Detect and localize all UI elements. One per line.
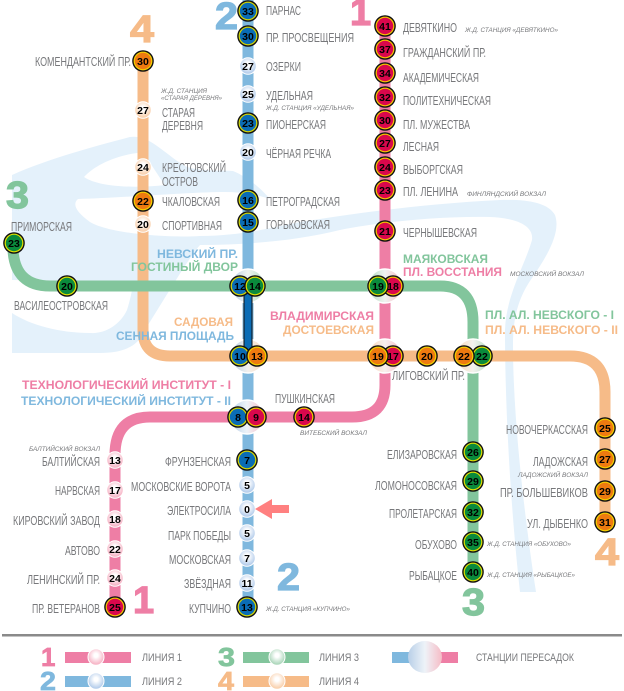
interchange: Gostiny Dvor <box>244 275 266 297</box>
station labels: line 2 south: МОСКОВСКИЕ ВОРОТА <box>131 479 231 494</box>
line 2 stations <box>236 0 259 618</box>
railway and station notes: БАЛТИЙСКИЙ ВОКЗАЛ <box>29 444 101 453</box>
station labels: line 4 south: ЛАДОЖСКАЯ <box>533 454 588 469</box>
station: Staraya Derevnya: 27 <box>137 105 149 117</box>
station: Primorskaya: 23 <box>8 238 20 250</box>
heading: Nevsky / Gostiny: НЕВСКИЙ ПР. <box>157 246 238 261</box>
interchange: Tekhnolog I: 9 <box>253 412 259 424</box>
station labels: line 3 west <box>11 219 108 313</box>
station: Novocherkasskaya <box>594 417 616 439</box>
legend <box>40 641 574 691</box>
line 2 track <box>242 0 254 607</box>
station labels: line 2 south <box>131 454 231 616</box>
station labels: line 2 north: ЧЁРНАЯ РЕЧКА <box>266 146 331 161</box>
station: Park Pobedy: 5 <box>244 528 250 540</box>
station: Dybenko: 31 <box>599 517 611 529</box>
station: Elizarovskaya: 26 <box>467 447 479 459</box>
station labels: line 2 south: ПАРК ПОБЕДЫ <box>168 528 231 543</box>
station: Gorkovskaya: 15 <box>242 217 254 229</box>
station labels: line 3 west: ПРИМОРСКАЯ <box>11 219 72 234</box>
station labels: line 4 north: КОМЕНДАНТСКИЙ ПР. <box>35 54 131 69</box>
heading: Tekhnologichesky <box>21 377 231 408</box>
arrow: you are here <box>255 499 289 519</box>
station labels: line 1 south: ЛЕНИНСКИЙ ПР. <box>27 572 100 587</box>
station: Udelnaya: 25 <box>242 89 254 101</box>
station: Udelnaya <box>240 86 256 102</box>
railway and station notes: ВИТЕБСКИЙ ВОКЗАЛ <box>300 428 368 437</box>
station: Lomonosovskaya: 29 <box>467 476 479 488</box>
station: Baltiyskaya: 13 <box>109 455 121 467</box>
station labels: line 2 south: ЭЛЕКТРОСИЛА <box>167 503 231 518</box>
interchange: Sadovaya: 13 <box>251 351 263 363</box>
railway and station notes: ФИНЛЯНДСКИЙ ВОКЗАЛ <box>467 189 547 198</box>
station: Frunzenskaya: 7 <box>244 455 250 467</box>
numeral 2 bottom: 2 <box>277 557 300 599</box>
station: Dybenko <box>594 511 616 533</box>
station: Prosvescheniya: 30 <box>242 31 254 43</box>
station: Ladozhskaya: 27 <box>599 454 611 466</box>
station: Narvskaya: 17 <box>109 485 121 497</box>
station: Proletarskaya: 32 <box>467 507 479 519</box>
station: Elizarovskaya <box>462 441 484 463</box>
station: Krestovsky <box>135 159 151 175</box>
station: Kirovsky: 18 <box>109 514 121 526</box>
heading: Vladimirskaya / Dostoevskaya: ДОСТОЕВСКАЯ <box>283 323 374 337</box>
station: Pushkinskaya <box>293 406 315 428</box>
interchange halo: Технологический <box>230 400 264 434</box>
heading: Sadovaya / Sennaya: СЕННАЯ ПЛОЩАДЬ <box>116 329 234 343</box>
heading: Mayakovskaya / Vosstaniya: ПЛ. ВОССТАНИЯ <box>403 265 502 279</box>
station: Kupchino: 13 <box>241 602 253 614</box>
heading: Tekhnologichesky: ТЕХНОЛОГИЧЕСКИЙ ИНСТИТУТ - I <box>22 377 231 392</box>
line 1 stations <box>104 15 396 618</box>
station labels: line 2 north: ПАРНАС <box>266 3 301 18</box>
station: Grazhdansky: 37 <box>379 44 391 56</box>
station: Veteranov: 25 <box>109 602 121 614</box>
heading: Vladimirskaya / Dostoevskaya <box>270 309 374 337</box>
station labels: line 3 south: ПРОЛЕТАРСКАЯ <box>389 506 457 521</box>
station: Muzhestva: 30 <box>379 115 391 127</box>
station labels: middle <box>275 368 465 406</box>
station labels: line 1 south <box>13 454 100 616</box>
station labels: line 1 north: ГРАЖДАНСКИЙ ПР. <box>403 45 486 60</box>
heading: Mayakovskaya / Vosstaniya <box>403 252 502 279</box>
line 4 track <box>143 61 605 522</box>
interchange: Ploshchad Vosstaniya: 18 <box>387 281 399 293</box>
station: Zvezdnaya <box>239 575 255 591</box>
station labels: line 2 south: КУПЧИНО <box>189 601 231 616</box>
railway and station notes: Ж.Д. СТАНЦИЯ «РЫБАЦКОЕ» <box>486 572 575 579</box>
station: Moskovskie Vorota: 5 <box>244 480 250 492</box>
station: Zvezdnaya: 11 <box>241 578 253 590</box>
numeral 1 bottom: 1 <box>133 580 154 622</box>
interchange stations <box>227 275 493 428</box>
station: Avtovo: 22 <box>109 544 121 556</box>
heading: Alexander Nevsky: ПЛ. АЛ. НЕВСКОГО - II <box>485 323 618 337</box>
station: Lesnaya: 27 <box>379 138 391 150</box>
station labels: line 4 north: КРЕСТОВСКИЙ <box>162 160 226 175</box>
station labels: line 1 south: КИРОВСКИЙ ЗАВОД <box>13 513 100 528</box>
station labels: line 2 north: ОЗЕРКИ <box>266 59 301 74</box>
station: Lesnaya <box>374 132 396 154</box>
station labels: line 1 north: ВЫБОРГСКАЯ <box>403 162 463 177</box>
station labels: line 4 north <box>35 54 226 233</box>
station labels: line 1 north: ПОЛИТЕХНИЧЕСКАЯ <box>403 93 491 108</box>
railway and station notes: МОСКОВСКИЙ ВОКЗАЛ <box>510 269 585 278</box>
heading: Alexander Nevsky <box>485 308 618 337</box>
interchange: Tekhnolog II <box>227 406 249 428</box>
heading: Tekhnologichesky: ТЕХНОЛОГИЧЕСКИЙ ИНСТИТУТ - II <box>21 393 231 408</box>
station: Politekhnicheskaya <box>374 86 396 108</box>
interchange headings <box>21 246 618 408</box>
station labels: line 3 south: РЫБАЦКОЕ <box>409 568 457 583</box>
numeral 3 bottom: 3 <box>462 582 485 624</box>
interchange: Nevskogo II: 22 <box>458 351 470 363</box>
station: Moskovskaya <box>239 550 255 566</box>
interchange: Tekhnolog II: 8 <box>235 412 241 424</box>
line 3 stations <box>3 232 484 583</box>
station: Sportivnaya: 20 <box>137 219 149 231</box>
interchange: Nevsky Prospekt <box>229 275 251 297</box>
interchange: Vladimirskaya: 17 <box>387 351 399 363</box>
station: Chernyshevskaya: 21 <box>379 226 391 238</box>
railway and station notes: Ж.Д. СТАНЦИЯ «ОБУХОВО» <box>486 541 571 548</box>
railway and station notes: ЛАДОЖСКИЙ ВОКЗАЛ <box>517 470 589 479</box>
heading: Nevsky / Gostiny <box>131 246 238 274</box>
station labels: line 3 south: ЕЛИЗАРОВСКАЯ <box>387 447 457 462</box>
legend item: line 4: ЛИНИЯ 4 <box>319 676 359 688</box>
station labels: line 2 south: ФРУНЗЕНСКАЯ <box>165 454 231 469</box>
station labels: line 4 south <box>500 422 588 531</box>
station: Chernaya Rechka <box>240 144 256 160</box>
station: Ligovsky: 20 <box>421 351 433 363</box>
station: Baltiyskaya <box>107 452 123 468</box>
station: Devyatkino: 41 <box>379 21 391 33</box>
station labels: line 4 north: ОСТРОВ <box>162 174 198 189</box>
station: Rybatskoe: 40 <box>467 567 479 579</box>
interchange: Gostiny Dvor: 14 <box>249 281 261 293</box>
interchange halo: Владимирская <box>368 339 402 373</box>
station: Muzhestva <box>374 109 396 131</box>
legend item: line 2: ЛИНИЯ 2 <box>142 676 182 688</box>
connector: Gostiny Dvor to Sennaya <box>244 290 252 352</box>
heading: Mayakovskaya / Vosstaniya: МАЯКОВСКАЯ <box>403 252 488 266</box>
station: Komendantsky: 30 <box>137 56 149 68</box>
station labels: middle: ЛИГОВСКИЙ ПР. <box>392 368 465 383</box>
station labels: line 2 north: ПЕТРОГРАДСКАЯ <box>266 194 340 209</box>
station: Novocherkasskaya: 25 <box>599 423 611 435</box>
interchange: Ploshchad Vosstaniya <box>382 275 404 297</box>
station: Ladozhskaya <box>594 448 616 470</box>
station: Grazhdansky <box>374 38 396 60</box>
station: Elektrosila <box>239 501 255 517</box>
interchange halo: Невский <box>231 269 265 303</box>
station: Lenina: 23 <box>379 185 391 197</box>
station labels: line 1 north: ПЛ. МУЖЕСТВА <box>403 117 470 132</box>
heading: Alexander Nevsky: ПЛ. АЛ. НЕВСКОГО - I <box>485 308 614 322</box>
station: Vyborgskaya: 24 <box>379 162 391 174</box>
line 4 stations <box>132 50 616 533</box>
station: Ozerki: 27 <box>242 61 254 73</box>
interchange halo: Садовая <box>231 339 265 373</box>
numeral 4 bottom: 4 <box>595 532 619 574</box>
station: Prosvescheniya <box>237 25 259 47</box>
railway and station notes: «СТАРАЯ ДЕРЕВНЯ» <box>161 95 222 102</box>
station: Politekhnicheskaya: 32 <box>379 92 391 104</box>
interchange: Dostoevskaya <box>367 345 389 367</box>
line 1 track <box>115 20 385 607</box>
station: Komendantsky <box>132 50 154 72</box>
station: Proletarskaya <box>462 501 484 523</box>
river background <box>12 137 556 592</box>
station labels: line 4 south: ПР. БОЛЬШЕВИКОВ <box>500 485 588 500</box>
station labels: line 1 south: АВТОВО <box>65 543 100 558</box>
numeral 3 left: 3 <box>6 175 29 217</box>
station labels: line 2 south: МОСКОВСКАЯ <box>169 552 231 567</box>
station labels: line 2 north <box>266 3 354 232</box>
interchange: Vladimirskaya <box>382 345 404 367</box>
station: Bolshevikov <box>594 480 616 502</box>
legend item: line 3 <box>218 642 359 672</box>
legend item: line 4 <box>218 666 359 691</box>
station labels: line 1 north: ПЛ. ЛЕНИНА <box>403 184 458 199</box>
station labels: line 4 north: СТАРАЯ <box>162 105 195 120</box>
station: Moskovskaya: 7 <box>244 553 250 565</box>
station labels: line 4 north: ЧКАЛОВСКАЯ <box>162 194 220 209</box>
station labels: line 2 north: ПР. ПРОСВЕЩЕНИЯ <box>266 30 354 45</box>
interchange: Nevskogo I <box>471 345 493 367</box>
station: Narvskaya <box>107 482 123 498</box>
station: Petrogradskaya: 16 <box>242 195 254 207</box>
station: Leninsky <box>107 570 123 586</box>
station: Chkalovskaya <box>132 190 154 212</box>
station labels: line 2 north: ПИОНЕРСКАЯ <box>266 117 326 132</box>
station: Akademicheskaya: 34 <box>379 68 391 80</box>
station labels: line 1 south: ПР. ВЕТЕРАНОВ <box>32 601 100 616</box>
station: Ozerki <box>240 58 256 74</box>
interchange: Sadovaya <box>246 345 268 367</box>
station: Vyborgskaya <box>374 156 396 178</box>
interchange: Nevskogo I: 22 <box>476 351 488 363</box>
railway and station notes: Ж.Д. СТАНЦИЯ «КУПЧИНО» <box>265 606 350 613</box>
station: Primorskaya <box>3 232 25 254</box>
interchange halo: Невского <box>456 339 490 373</box>
station: Moskovskie Vorota <box>239 477 255 493</box>
station: Park Pobedy <box>239 525 255 541</box>
station: Obukhovo <box>462 531 484 553</box>
legend item: line 1: ЛИНИЯ 1 <box>142 652 182 664</box>
line 3 track <box>13 243 473 572</box>
legend item: line 2 <box>40 666 182 691</box>
interchange: Sennaya: 10 <box>234 351 246 363</box>
station: Chernaya Rechka: 20 <box>242 147 254 159</box>
legend item: interchange <box>392 641 574 673</box>
interchange: Sennaya <box>229 345 251 367</box>
station labels: line 1 north: ДЕВЯТКИНО <box>403 20 457 35</box>
station: Devyatkino <box>374 15 396 37</box>
interchange: Mayakovskaya: 19 <box>372 281 384 293</box>
heading: Sadovaya / Sennaya <box>116 315 234 343</box>
station labels: line 1 north: АКАДЕМИЧЕСКАЯ <box>403 70 479 85</box>
station labels: line 3 south: ОБУХОВО <box>415 537 457 552</box>
station: Ligovsky <box>416 345 438 367</box>
railway and station notes: Ж.Д. СТАНЦИЯ <box>160 88 208 95</box>
legend item: line 3: 3 <box>218 642 235 672</box>
station: Parnas: 33 <box>242 6 254 18</box>
numeral 4 top: 4 <box>130 9 154 51</box>
interchange: Nevsky Prospekt: 12 <box>234 281 246 293</box>
station: Lomonosovskaya <box>462 470 484 492</box>
station: Staraya Derevnya <box>135 102 151 118</box>
station: Chkalovskaya: 22 <box>137 196 149 208</box>
station labels: line 2 north: УДЕЛЬНАЯ <box>266 88 313 103</box>
station labels: line 2 south: ЗВЁЗДНАЯ <box>184 576 231 591</box>
legend item: line 1: 1 <box>41 642 55 672</box>
station: Lenina <box>374 179 396 201</box>
heading: Vladimirskaya / Dostoevskaya: ВЛАДИМИРСКАЯ <box>270 309 374 323</box>
station: Bolshevikov: 29 <box>599 486 611 498</box>
station: Leninsky: 24 <box>109 573 121 585</box>
station: Krestovsky: 24 <box>137 162 149 174</box>
station labels: middle: ПУШКИНСКАЯ <box>275 391 335 406</box>
station labels: line 1 north: ЛЕСНАЯ <box>403 139 439 154</box>
station: Rybatskoe <box>462 561 484 583</box>
railway and station notes: Ж.Д. СТАНЦИЯ «ДЕВЯТКИНО» <box>464 27 558 34</box>
railway and station notes: Ж.Д. СТАНЦИЯ «УДЕЛЬНАЯ» <box>265 105 354 112</box>
heading: Sadovaya / Sennaya: САДОВАЯ <box>174 315 233 329</box>
station: Avtovo <box>107 541 123 557</box>
river island <box>84 153 165 187</box>
station labels: line 3 south: ЛОМОНОСОВСКАЯ <box>375 478 457 493</box>
station: Kirovsky <box>107 511 123 527</box>
station: Chernyshevskaya <box>374 220 396 242</box>
station labels: line 3 west: ВАСИЛЕОСТРОВСКАЯ <box>14 298 108 313</box>
station: Parnas <box>237 0 259 22</box>
station: Kupchino <box>236 596 258 618</box>
station: Sportivnaya <box>135 216 151 232</box>
heading: Nevsky / Gostiny: ГОСТИНЫЙ ДВОР <box>131 259 238 274</box>
station: Vasileostrovskaya <box>56 275 78 297</box>
station: Akademicheskaya <box>374 62 396 84</box>
station labels: line 1 north: ЧЕРНЫШЕВСКАЯ <box>403 225 477 240</box>
interchange: Nevskogo II <box>453 345 475 367</box>
station labels: line 4 north: СПОРТИВНАЯ <box>162 218 222 233</box>
station: Vasileostrovskaya: 20 <box>61 281 73 293</box>
station: Frunzenskaya <box>236 449 258 471</box>
station labels: line 1 south: НАРВСКАЯ <box>55 483 100 498</box>
legend item: line 1 <box>41 642 182 672</box>
interchange halo: Маяковская <box>368 269 402 303</box>
station: Pushkinskaya: 14 <box>298 412 310 424</box>
station labels: line 4 north: ДЕРЕВНЯ <box>162 118 203 133</box>
station: Veteranov <box>104 596 126 618</box>
interchange: Dostoevskaya: 19 <box>372 351 384 363</box>
station labels: line 3 south <box>375 447 457 583</box>
legend divider <box>2 634 622 636</box>
station: Elektrosila: 0 <box>244 504 250 516</box>
legend item: line 3: ЛИНИЯ 3 <box>319 652 359 664</box>
station: Obukhovo: 35 <box>467 537 479 549</box>
interchange: Mayakovskaya <box>367 275 389 297</box>
station: Gorkovskaya <box>237 211 259 233</box>
station labels: line 1 south: БАЛТИЙСКАЯ <box>42 454 100 469</box>
interchange: Tekhnolog I <box>245 406 267 428</box>
railway and station notes <box>29 27 589 613</box>
station labels: line 1 north <box>403 20 491 240</box>
station: Pionerskaya: 23 <box>242 118 254 130</box>
station: Petrogradskaya <box>237 189 259 211</box>
legend item: interchange: СТАНЦИИ ПЕРЕСАДОК <box>476 652 574 664</box>
station labels: line 4 south: УЛ. ДЫБЕНКО <box>527 516 588 531</box>
station labels: line 2 north: ГОРЬКОВСКАЯ <box>266 217 330 232</box>
station: Pionerskaya <box>237 112 259 134</box>
